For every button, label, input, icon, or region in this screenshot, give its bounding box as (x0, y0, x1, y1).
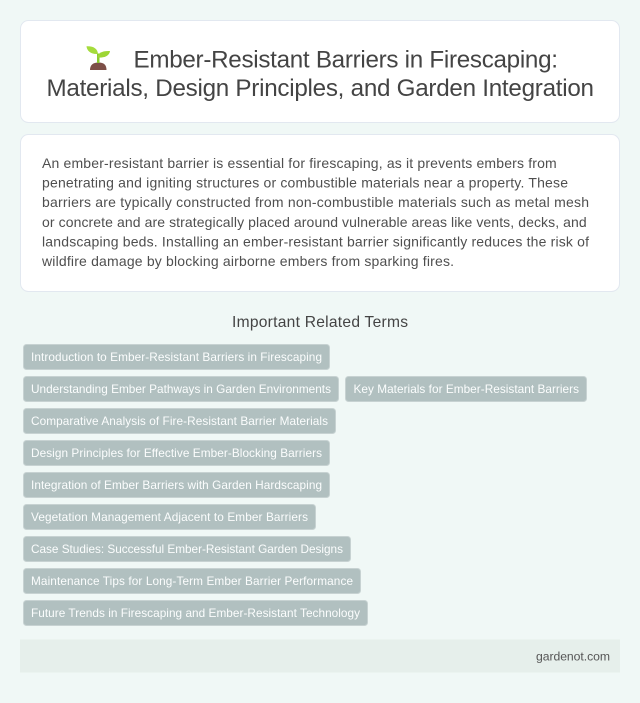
heading: related terms: Important Related Terms (232, 314, 408, 331)
panel: title card (20, 20, 620, 122)
tag 5 (24, 440, 330, 466)
tag 10 (24, 600, 368, 626)
tag 1: Introduction to Ember-Resistant Barriers in Firescaping (31, 350, 322, 364)
title text: Materials, Design Principles, and Garden Integration (46, 75, 594, 102)
tag 6 (24, 472, 330, 498)
tag 4 (24, 408, 336, 434)
tag 8 (24, 536, 350, 562)
description text (41, 155, 589, 269)
tag 10: Future Trends in Firescaping and Ember-Resistant Technology (31, 606, 360, 620)
panel: description (20, 134, 620, 292)
description text: barriers are typically constructed from non-combustible materials such as metal mesh (42, 194, 589, 210)
tag 4: Comparative Analysis of Fire-Resistant Barrier Materials (31, 414, 328, 428)
tag 2: Understanding Ember Pathways in Garden Environments (31, 382, 331, 396)
tag 5: Design Principles for Effective Ember-Blocking Barriers (31, 446, 322, 460)
description text: An ember-resistant barrier is essential for firescaping, as it prevents embers from (42, 155, 557, 171)
description text: wildfire damage by blocking airborne embers from sparking fires. (41, 253, 454, 269)
footer (20, 640, 620, 672)
title text: Ember-Resistant Barriers in Firescaping: (134, 46, 558, 74)
description text: or concrete and are strategically placed around vulnerable areas like vents, decks, and (42, 214, 587, 230)
tag 7: Vegetation Management Adjacent to Ember Barriers (31, 510, 308, 524)
tag list (24, 344, 586, 626)
title text (46, 46, 594, 102)
tag 6: Integration of Ember Barriers with Garden Hardscaping (31, 478, 322, 492)
footer: gardenot.com (536, 650, 610, 664)
tag 3: Key Materials for Ember-Resistant Barriers (354, 382, 579, 396)
icon: sprout (86, 46, 110, 70)
tag 2 (24, 376, 338, 402)
tag 8: Case Studies: Successful Ember-Resistant Garden Designs (31, 542, 343, 556)
tag 1 (24, 344, 330, 370)
description text: penetrating and igniting structures or combustible materials near a property. These (42, 175, 568, 191)
tag 3 (346, 376, 586, 402)
tag 9: Maintenance Tips for Long-Term Ember Barrier Performance (31, 574, 353, 588)
tag 9 (24, 568, 360, 594)
tag 7 (24, 504, 316, 530)
description text: landscaping beds. Installing an ember-resistant barrier significantly reduces the risk of (42, 233, 589, 249)
